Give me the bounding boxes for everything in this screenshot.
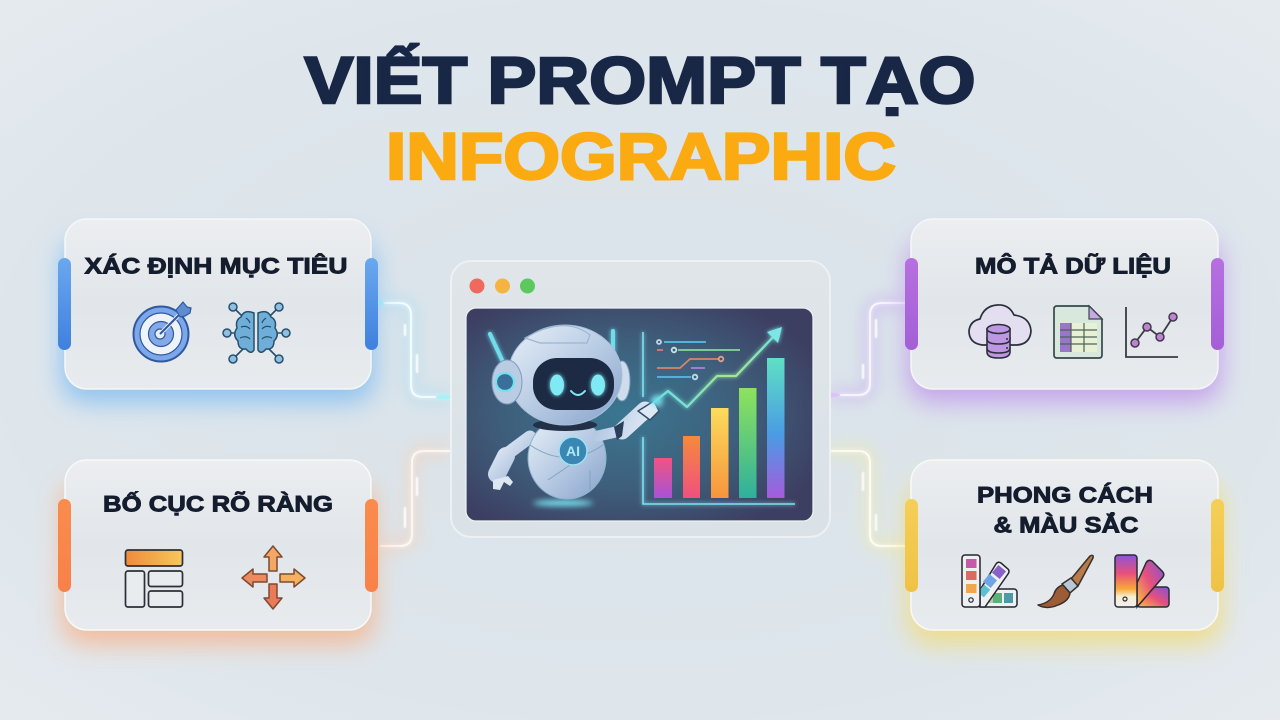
title — [304, 43, 976, 193]
panel: phong cách và màu sắc — [905, 460, 1224, 644]
icon: neural brain — [223, 303, 290, 363]
icon: page layout — [126, 550, 182, 607]
connector: bottom right to window — [830, 451, 905, 546]
panel: central app window — [451, 261, 830, 537]
icon: line chart — [1126, 307, 1178, 357]
icon: four way arrows — [242, 546, 305, 609]
icon: target with arrow — [134, 302, 191, 362]
icon: cloud database — [969, 305, 1031, 358]
heading: MÔ TẢ DỮ LIỆU — [975, 254, 1171, 278]
badge label: AI — [566, 443, 580, 459]
connector: bottom left to window — [380, 451, 451, 546]
title line 1: VIẾT PROMPT TẠO — [304, 43, 976, 117]
heading line 2: & MÀU SẮC — [994, 512, 1138, 538]
icon: gradient fan — [1115, 555, 1169, 607]
connector: top left to window — [378, 300, 452, 399]
illustration: robot presenter — [490, 325, 663, 506]
icon: colour swatches — [962, 555, 1017, 607]
window control dots — [470, 278, 535, 294]
screen — [466, 308, 813, 521]
heading: BỐ CỤC RÕ RÀNG — [103, 490, 333, 516]
icon: spreadsheet — [1054, 306, 1102, 358]
icon: paint brush — [1038, 555, 1093, 608]
heading: XÁC ĐỊNH MỤC TIÊU — [84, 254, 348, 278]
heading line 1: PHONG CÁCH — [977, 482, 1153, 508]
connector: top right to window — [824, 303, 905, 397]
panel: bố cục rõ ràng — [58, 460, 378, 644]
title line 2: INFOGRAPHIC — [386, 119, 896, 193]
panel: xác định mục tiêu — [58, 219, 378, 402]
panel: mô tả dữ liệu — [905, 219, 1224, 402]
chart: rising bars and trend line — [643, 327, 795, 504]
